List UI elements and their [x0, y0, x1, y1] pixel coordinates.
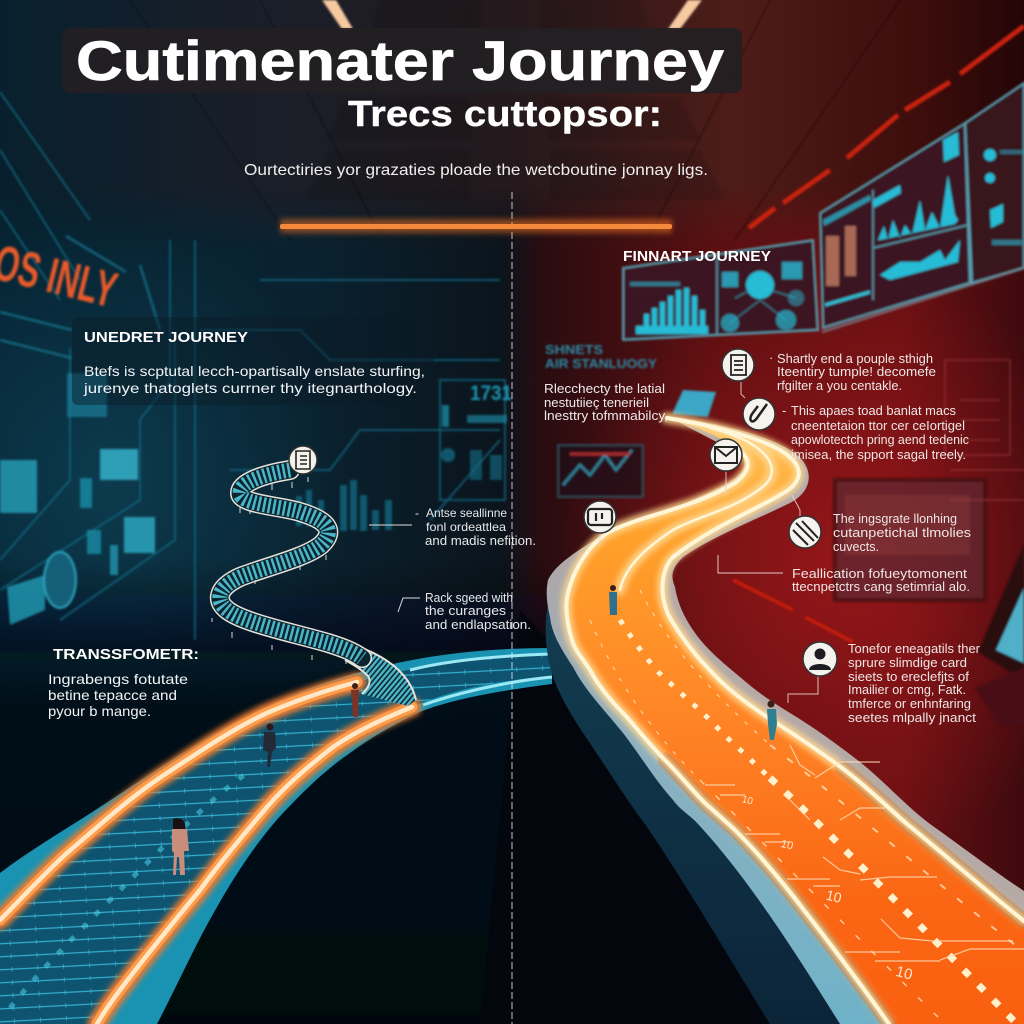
icon: card — [584, 501, 616, 533]
road outer dark rim — [546, 575, 1000, 1024]
callout: feallication: Feallication fofueytomonent — [792, 566, 967, 581]
road orange surface — [566, 418, 1024, 1024]
panel: mid-wall chart — [558, 445, 643, 497]
callout: sharly end: Iteentiry tumple! decomefe — [777, 364, 936, 379]
text block: air stanluogy: AIR STANLUOGY — [545, 356, 657, 371]
walkers on paths — [172, 585, 777, 875]
ribbon hooks — [212, 477, 346, 664]
callout: tonefor — [848, 641, 981, 725]
callout: rack sgeed: the curanges — [425, 604, 506, 618]
callout: tonefor: seetes mlpally jnanct — [848, 710, 976, 725]
text block: transformation: pyour b mange. — [48, 703, 151, 719]
right wall dashboards — [558, 83, 1024, 726]
road right grey rim — [620, 416, 1024, 1024]
panel: wall screen behind text — [835, 480, 985, 600]
icon: document right — [722, 349, 754, 381]
icon: tool — [789, 516, 821, 548]
left teal road — [0, 648, 552, 1024]
callout: this apaes — [782, 403, 969, 462]
icon connectors — [600, 382, 818, 703]
text block: transformation — [48, 646, 199, 719]
text block: unedret journey — [72, 317, 434, 405]
callout: tonefor: sieets to ereclefjts of — [848, 669, 969, 684]
ceiling with perspective panels — [0, 0, 1024, 250]
icon: hook — [743, 398, 775, 430]
spiral ribbon road — [212, 470, 416, 706]
text block: air stanluogy: Rlecchecty the latial — [544, 381, 665, 396]
text block: air stanluogy: SHNETS — [545, 342, 603, 357]
callout: rack sgeed: and endlapsation. — [425, 618, 531, 632]
heading: finnart journey: FINNART JOURNEY — [623, 248, 771, 265]
road distance numbers: 10 — [741, 794, 754, 808]
text block: transformation: betine tepacce and — [48, 687, 177, 703]
orange horizontal light bar — [280, 219, 672, 233]
road distance numbers: 10 — [894, 963, 914, 984]
road circuit trace — [10, 773, 247, 1008]
person: near left — [172, 818, 189, 875]
callout: tonefor: Tonefor eneagatils ther — [848, 641, 981, 656]
left wall: circuit screens — [0, 92, 512, 640]
callout: the ingsgrate: cuvects. — [833, 539, 879, 554]
road circuit traces — [705, 745, 1024, 961]
person: right upper — [609, 585, 617, 615]
text block: air stanluogy: nestutiieç tenerieil — [544, 395, 649, 410]
callout: sharly end: Shartly end a pouple sthigh — [777, 351, 933, 366]
road left pale rim — [547, 416, 1000, 1024]
callout: antse seallinne: - — [415, 506, 419, 520]
callout: tonefor: sprure slimdige card — [848, 655, 967, 670]
icon: person — [803, 642, 837, 676]
person: right lower — [767, 700, 777, 740]
callout: antse seallinne: fonl ordeattlea — [426, 520, 506, 534]
callout: feallication — [718, 555, 970, 594]
road distance numbers: 10 — [824, 887, 844, 906]
callout: tonefor: Imailier or cmg, Fatk. — [848, 682, 966, 697]
title bar: Cutimenater Journey — [76, 29, 724, 92]
ceiling lights — [322, 0, 702, 29]
subtitle: Trecs cuttopsor: — [348, 93, 662, 134]
tablet screen — [672, 390, 716, 417]
red floor strips — [733, 580, 853, 642]
callout: feallication: ttecnpetctrs cang setimrial alo. — [792, 579, 970, 594]
red diagonal ceiling strip — [749, 26, 1024, 228]
divider: dashed center line — [511, 192, 513, 1024]
person: far left — [351, 683, 359, 717]
callout: this apaes: - — [782, 403, 786, 418]
wall readouts — [945, 360, 1024, 500]
dim wall chart — [296, 480, 392, 531]
road glowing edge lines — [566, 418, 1024, 1024]
intro line: Ourtectiries yor grazaties ploade the wetcboutine jonnay ligs. — [244, 162, 708, 179]
callout: rack sgeed: Rack sgeed with — [425, 591, 513, 605]
left wall: circuit screens: 1731 — [470, 382, 512, 405]
callout: sharly end: · — [769, 350, 773, 365]
callout: this apaes: apowlotectch pring aend tedenic — [791, 432, 969, 447]
road distance numbers: 10 — [780, 838, 794, 853]
icon: envelope — [710, 439, 742, 471]
panel: far dashboard — [965, 83, 1024, 283]
callout: the ingsgrate: The ingsgrate llonhing — [833, 511, 957, 526]
text block: unedret journey: jurenye thatoglets currner thy itegnarthology. — [83, 380, 417, 396]
callout: sharly end: rfgilter a you centakle. — [777, 378, 902, 393]
text block: air stanluogy — [544, 342, 668, 423]
person: mid left — [263, 724, 276, 767]
road lane dashes — [590, 590, 1015, 1024]
callout: tonefor: tmferce or enhnfaring — [848, 696, 971, 711]
panel: left dashboard — [623, 240, 818, 340]
road distance numbers — [741, 794, 914, 984]
callout: the ingsgrate — [833, 511, 972, 554]
panel: center dashboard — [820, 123, 970, 328]
callout: this apaes: cneentetaion ttor cer ceIortigel — [791, 418, 965, 433]
text block: transformation: Ingrabengs fotutate — [48, 671, 188, 687]
laptop screen — [975, 545, 1024, 726]
callout: antse seallinne — [369, 506, 536, 548]
text block: unedret journey: Btefs is scptutal lecch-opartisally enslate sturfing, — [84, 363, 425, 379]
callout: this apaes: imisea, the spport sagal treely. — [791, 447, 966, 462]
callout: rack sgeed — [398, 591, 531, 632]
callout: the ingsgrate: cutanpetichal tlmolies — [833, 525, 972, 540]
text block: transformation: TRANSSFOMETR: — [53, 646, 199, 663]
callout: sharly end — [769, 350, 936, 393]
callout: antse seallinne: Antse seallinne — [426, 506, 507, 520]
icon: document left — [289, 446, 317, 474]
text block: unedret journey: UNEDRET JOURNEY — [84, 329, 248, 346]
callout: antse seallinne: and madis nefition. — [425, 534, 536, 548]
callout: this apaes: This apaes toad banlat macs — [791, 403, 956, 418]
left road glowing rails — [0, 682, 412, 1024]
right orange road — [546, 416, 1024, 1024]
text block: air stanluogy: lnesttry tofmmabilcy, — [544, 408, 668, 423]
